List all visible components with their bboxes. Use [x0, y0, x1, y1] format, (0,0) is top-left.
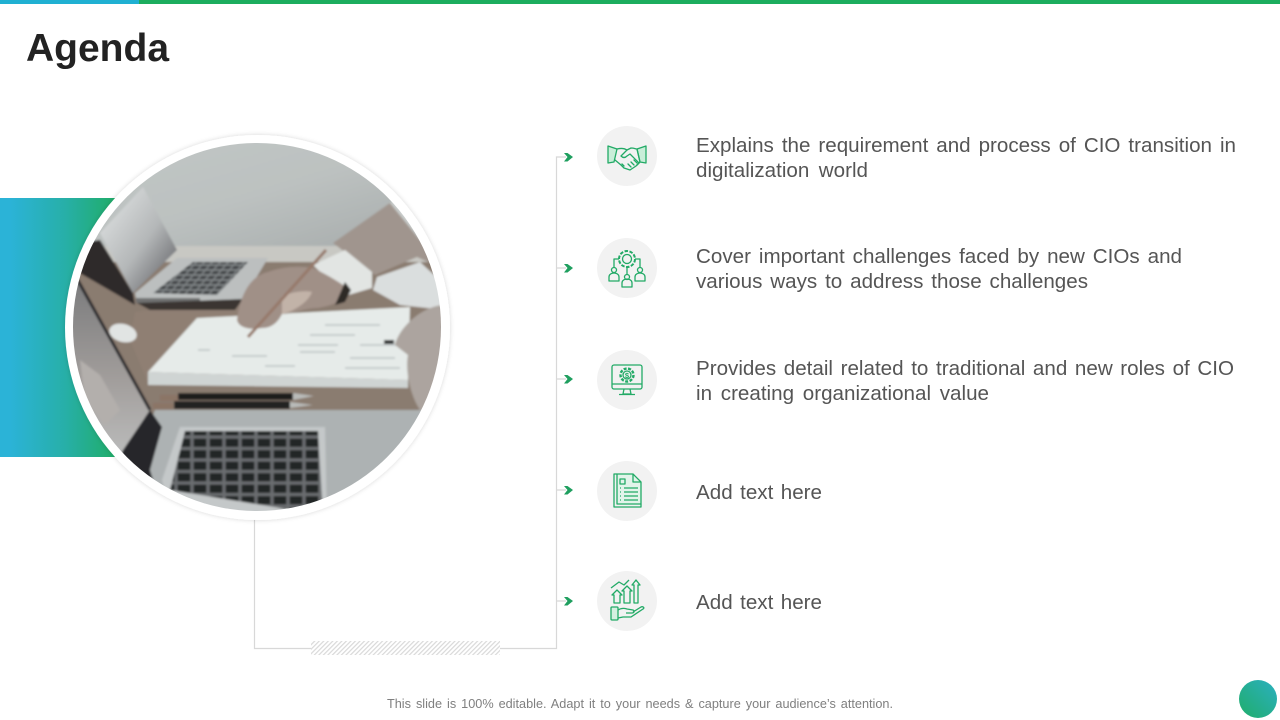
sleeves and arms	[333, 203, 429, 276]
text: item 3	[696, 357, 1234, 405]
text: item 1: digitalization world	[696, 159, 868, 182]
icon: handshake	[597, 126, 657, 186]
footer note: This slide is 100% editable. Adapt it to your needs & capture your audience’s attention.	[387, 697, 893, 711]
mouse	[108, 322, 138, 344]
icon: document list	[597, 461, 657, 521]
icon: gear with people	[597, 238, 657, 298]
pencil	[248, 250, 326, 337]
icon: monitor with dollar gear: $	[625, 371, 630, 380]
text: item 2	[696, 245, 1182, 293]
text: item 4: Add text here	[696, 481, 822, 504]
front laptop	[148, 408, 422, 498]
text: item 2: various ways to address those challenges	[696, 270, 1088, 293]
paper	[148, 307, 410, 380]
top accent bar	[0, 0, 1280, 4]
gradient band behind photo	[0, 198, 130, 457]
text: item 3: in creating organizational value	[696, 382, 989, 405]
corner gradient dot	[1239, 680, 1277, 718]
left laptop lid	[73, 284, 150, 453]
title: Agenda	[26, 27, 169, 70]
text: item 1: Explains the requirement and process of CIO transition in	[696, 134, 1236, 157]
text: item 5: Add text here	[696, 591, 822, 614]
icon: monitor with dollar gear	[597, 350, 657, 410]
text: item 1	[696, 134, 1236, 182]
icon: hand with growth chart	[597, 571, 657, 631]
text: item 2: Cover important challenges faced by new CIOs and	[696, 245, 1182, 268]
right hand	[395, 305, 445, 410]
writing hand	[237, 267, 350, 329]
text: item 3: Provides detail related to traditional and new roles of CIO	[696, 357, 1234, 380]
pens	[162, 396, 177, 400]
back laptop	[100, 187, 177, 293]
photo: office desk with laptops in white ring	[64, 133, 452, 522]
